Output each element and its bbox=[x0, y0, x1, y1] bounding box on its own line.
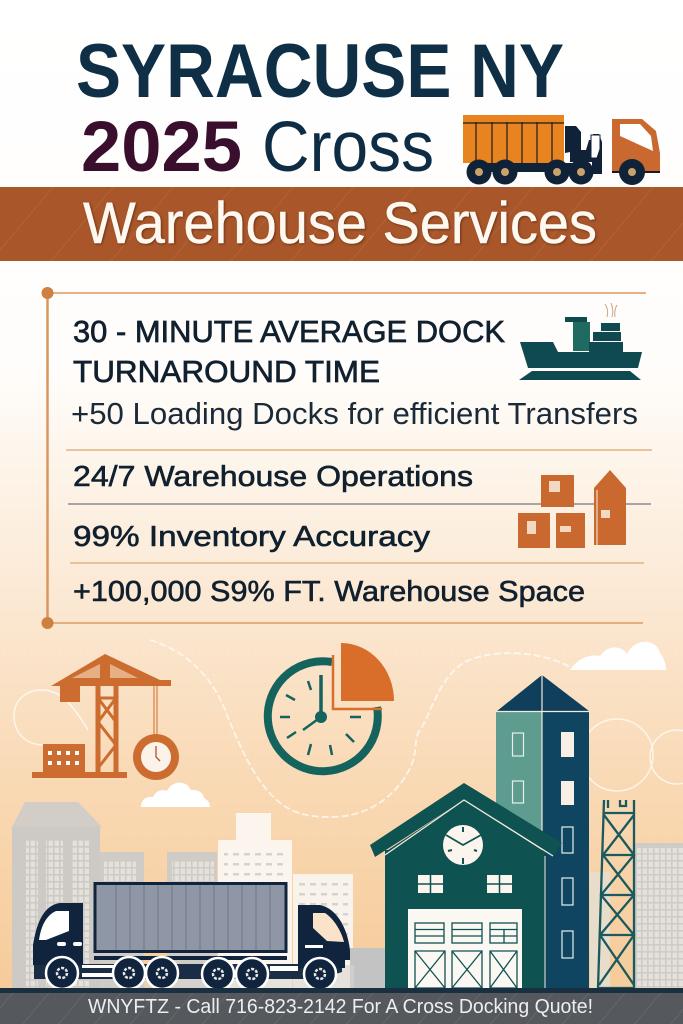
warehouse roof bbox=[370, 783, 562, 857]
container truck bbox=[33, 884, 350, 990]
icon: orange truck bbox=[463, 115, 660, 185]
decorative circles bbox=[14, 690, 683, 791]
stat: loading docks: +50 Loading Docks for efficient Transfers bbox=[71, 396, 638, 431]
footer bar bbox=[0, 993, 683, 1024]
stat: operations: 24/7 Warehouse Operations bbox=[73, 461, 473, 493]
tower building bbox=[496, 675, 589, 990]
warehouse building bbox=[370, 783, 562, 988]
background buildings right bbox=[590, 843, 683, 988]
stat: dock turnaround line 2: TURNAROUND TIME bbox=[73, 354, 380, 389]
warehouse clock bbox=[443, 825, 483, 865]
left cab bbox=[33, 903, 83, 965]
small cloud bbox=[141, 783, 210, 807]
warehouse garage door bbox=[408, 909, 522, 988]
panel: key statistics bbox=[42, 287, 652, 629]
title: Cross: Cross bbox=[262, 108, 434, 187]
chassis bbox=[34, 964, 342, 979]
shipping container bbox=[94, 884, 287, 960]
right cab bbox=[298, 905, 350, 968]
ground line bbox=[0, 988, 683, 993]
icon: hanging clock wheel bbox=[133, 734, 179, 780]
lattice tower bbox=[598, 800, 635, 988]
background buildings left bbox=[12, 802, 386, 988]
large cloud bbox=[570, 642, 666, 670]
icon: warehouse boxes bbox=[518, 470, 626, 548]
title: Syracuse NY: SYRACUSE NY bbox=[76, 29, 564, 114]
banner: Warehouse Services bbox=[0, 187, 683, 261]
icon: tower crane bbox=[32, 654, 179, 780]
warehouse windows bbox=[418, 875, 512, 893]
stat: dock turnaround line 1: 30 - MINUTE AVERAGE DOCK bbox=[73, 314, 505, 349]
wheels bbox=[46, 957, 336, 990]
title: 2025: 2025 bbox=[81, 108, 242, 187]
stat: inventory accuracy: 99% Inventory Accuracy bbox=[73, 521, 431, 553]
clock with quarter pie bbox=[268, 643, 394, 771]
banner heading: Warehouse Services bbox=[83, 191, 597, 256]
stat: warehouse space: +100,000 S9% FT. Warehouse Space bbox=[73, 576, 585, 608]
icon: cargo ship bbox=[519, 303, 642, 380]
footer call to action: WNYFTZ - Call 716-823-2142 For A Cross Docking Quote! bbox=[88, 996, 593, 1018]
dashed route line bbox=[150, 640, 570, 817]
